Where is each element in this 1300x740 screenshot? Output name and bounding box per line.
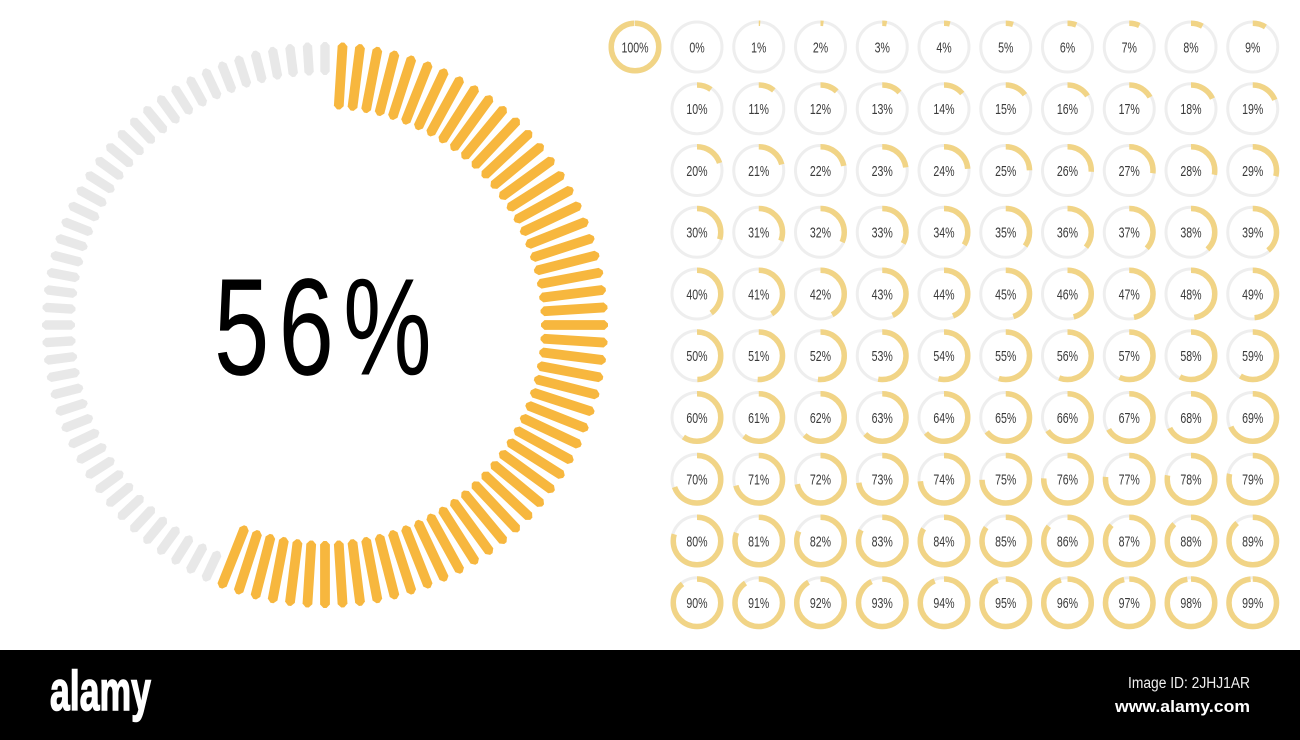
gauge 100%: [610, 22, 660, 72]
gauge 17%: 17%: [1119, 101, 1140, 117]
gauge 58%: [1166, 331, 1216, 381]
gauge 49%: [1228, 269, 1278, 319]
large radial gauge showing 56%: [42, 42, 608, 608]
gauge 16%: 16%: [1057, 101, 1078, 117]
gauge 3%: 3%: [875, 40, 890, 56]
gauge 59%: 59%: [1242, 348, 1263, 364]
gauge 70%: 70%: [686, 472, 708, 488]
gauge 13%: [857, 84, 907, 134]
gauge 68%: 68%: [1180, 410, 1202, 426]
gauge 12%: [796, 84, 846, 134]
gauge 64%: 64%: [933, 410, 955, 426]
gauge 1%: [734, 22, 784, 72]
gauge 95%: [981, 578, 1031, 628]
gauge 100%: 100%: [621, 40, 649, 56]
gauge 14%: 14%: [933, 101, 955, 117]
gauge 33%: [857, 207, 907, 257]
gauge 43%: 43%: [872, 287, 893, 303]
gauge 19%: [1228, 84, 1278, 134]
small gauge grid: [610, 22, 1278, 628]
gauge 91%: [734, 578, 784, 628]
gauge 98%: [1166, 578, 1216, 628]
gauge 72%: [796, 454, 846, 504]
gauge 18%: 18%: [1180, 101, 1202, 117]
gauge 61%: [734, 392, 784, 442]
gauge 40%: [672, 269, 722, 319]
gauge 77%: 77%: [1119, 472, 1140, 488]
gauge 62%: [796, 392, 846, 442]
gauge 42%: [796, 269, 846, 319]
gauge 89%: 89%: [1242, 534, 1263, 550]
gauge 3%: [857, 22, 907, 72]
gauge 11%: [734, 84, 784, 134]
gauge 0%: [672, 22, 722, 72]
gauge 99%: 99%: [1242, 595, 1263, 611]
gauge 30%: [672, 207, 722, 257]
gauge 98%: 98%: [1180, 595, 1202, 611]
gauge 17%: [1104, 84, 1154, 134]
gauge 90%: [672, 578, 722, 628]
gauge 26%: 26%: [1057, 163, 1078, 179]
gauge 32%: [796, 207, 846, 257]
gauge 66%: [1042, 392, 1092, 442]
gold progress ticks: [216, 42, 608, 608]
gauge 20%: 20%: [686, 163, 708, 179]
gauge 2%: 2%: [813, 40, 828, 56]
gauge 84%: [919, 516, 969, 566]
gauge 6%: [1042, 22, 1092, 72]
gauge 34%: [919, 207, 969, 257]
gauge 56%: 56%: [1057, 348, 1078, 364]
gauge 39%: [1228, 207, 1278, 257]
gauge 36%: [1042, 207, 1092, 257]
gauge 69%: 69%: [1242, 410, 1263, 426]
gauge 54%: 54%: [933, 348, 955, 364]
gauge 64%: [919, 392, 969, 442]
gauge 86%: [1042, 516, 1092, 566]
gauge 38%: 38%: [1180, 225, 1202, 241]
gauge 71%: [734, 454, 784, 504]
gauge 16%: [1042, 84, 1092, 134]
gauge 55%: 55%: [995, 348, 1016, 364]
gauge 87%: 87%: [1119, 534, 1140, 550]
gauge 89%: [1228, 516, 1278, 566]
gauge 86%: 86%: [1057, 534, 1078, 550]
gauge 40%: 40%: [686, 287, 708, 303]
gauge 53%: [857, 331, 907, 381]
gauge 95%: 95%: [995, 595, 1016, 611]
gauge 57%: [1104, 331, 1154, 381]
gauge 88%: [1166, 516, 1216, 566]
gauge 63%: [857, 392, 907, 442]
gauge 99%: [1228, 578, 1278, 628]
gauge 7%: [1104, 22, 1154, 72]
gauge 7%: 7%: [1122, 40, 1137, 56]
gauge 22%: 22%: [810, 163, 831, 179]
gauge 51%: [734, 331, 784, 381]
gauge 48%: [1166, 269, 1216, 319]
gauge 66%: 66%: [1057, 410, 1078, 426]
gauge 5%: 5%: [998, 40, 1013, 56]
gauge 92%: 92%: [810, 595, 831, 611]
gauge 51%: 51%: [748, 348, 769, 364]
gauge 93%: 93%: [872, 595, 893, 611]
gauge 31%: [734, 207, 784, 257]
gauge 52%: [796, 331, 846, 381]
image id: Image ID: 2JHJ1AR: [1128, 675, 1250, 692]
gauge 0%: 0%: [689, 40, 705, 56]
gauge 1%: 1%: [751, 40, 766, 56]
gauge 56%: [1042, 331, 1092, 381]
gauge 41%: 41%: [748, 287, 769, 303]
gauge 30%: 30%: [686, 225, 708, 241]
gauge 50%: [672, 331, 722, 381]
gauge 81%: 81%: [748, 534, 769, 550]
gauge 13%: 13%: [872, 101, 893, 117]
gauge 21%: [734, 146, 784, 196]
gauge 82%: 82%: [810, 534, 831, 550]
gauge 6%: 6%: [1060, 40, 1075, 56]
gauge 49%: 49%: [1242, 287, 1263, 303]
gauge 65%: [981, 392, 1031, 442]
gauge 14%: [919, 84, 969, 134]
gauge 18%: [1166, 84, 1216, 134]
gauge 35%: [981, 207, 1031, 257]
gauge 69%: [1228, 392, 1278, 442]
gauge 36%: 36%: [1057, 225, 1078, 241]
gauge 87%: [1104, 516, 1154, 566]
gauge 43%: [857, 269, 907, 319]
gauge 23%: 23%: [872, 163, 893, 179]
gauge 83%: [857, 516, 907, 566]
gauge 31%: 31%: [748, 225, 769, 241]
gauge 92%: [796, 578, 846, 628]
gauge 80%: [672, 516, 722, 566]
gauge 74%: 74%: [933, 472, 955, 488]
gauge 24%: 24%: [933, 163, 955, 179]
gauge 75%: [981, 454, 1031, 504]
gauge 62%: 62%: [810, 410, 831, 426]
gauge 32%: 32%: [810, 225, 831, 241]
gauge 4%: 4%: [936, 40, 952, 56]
gauge 53%: 53%: [872, 348, 893, 364]
gauge 88%: 88%: [1180, 534, 1202, 550]
gauge 15%: [981, 84, 1031, 134]
gauge 63%: 63%: [872, 410, 893, 426]
gauge 37%: 37%: [1119, 225, 1140, 241]
gauge 38%: [1166, 207, 1216, 257]
grey remaining ticks: [42, 42, 330, 583]
gauge 5%: [981, 22, 1031, 72]
gauge 46%: [1042, 269, 1092, 319]
gauge 85%: [981, 516, 1031, 566]
gauge 50%: 50%: [686, 348, 708, 364]
gauge 47%: 47%: [1119, 287, 1140, 303]
gauge 25%: [981, 146, 1031, 196]
gauge 41%: [734, 269, 784, 319]
gauge 78%: 78%: [1180, 472, 1202, 488]
gauge 84%: 84%: [933, 534, 955, 550]
gauge 27%: 27%: [1119, 163, 1140, 179]
website: www.alamy.com: [1114, 697, 1250, 716]
gauge 80%: 80%: [686, 534, 708, 550]
gauge 10%: [672, 84, 722, 134]
gauge 52%: 52%: [810, 348, 831, 364]
gauge 75%: 75%: [995, 472, 1016, 488]
gauge 90%: 90%: [686, 595, 708, 611]
gauge 2%: [796, 22, 846, 72]
gauge 25%: 25%: [995, 163, 1016, 179]
big percentage value: 56%: [214, 251, 441, 404]
gauge 72%: 72%: [810, 472, 831, 488]
gauge 27%: [1104, 146, 1154, 196]
gauge 29%: 29%: [1242, 163, 1263, 179]
gauge 60%: [672, 392, 722, 442]
gauge 76%: 76%: [1057, 472, 1078, 488]
gauge 10%: 10%: [686, 101, 708, 117]
gauge 44%: [919, 269, 969, 319]
gauge 12%: 12%: [810, 101, 831, 117]
gauge 23%: [857, 146, 907, 196]
gauge 45%: [981, 269, 1031, 319]
gauge 15%: 15%: [995, 101, 1016, 117]
gauge 8%: [1166, 22, 1216, 72]
gauge 11%: 11%: [749, 101, 769, 117]
gauge 83%: 83%: [872, 534, 893, 550]
gauge 93%: [857, 578, 907, 628]
gauge 20%: [672, 146, 722, 196]
gauge 58%: 58%: [1180, 348, 1202, 364]
gauge 54%: [919, 331, 969, 381]
gauge 96%: 96%: [1057, 595, 1078, 611]
gauge 28%: 28%: [1180, 163, 1202, 179]
gauge 33%: 33%: [872, 225, 893, 241]
gauge 59%: [1228, 331, 1278, 381]
gauge 71%: 71%: [748, 472, 769, 488]
gauge 37%: [1104, 207, 1154, 257]
gauge 76%: [1042, 454, 1092, 504]
gauge 19%: 19%: [1242, 101, 1263, 117]
gauge 22%: [796, 146, 846, 196]
gauge 97%: [1104, 578, 1154, 628]
gauge 94%: 94%: [933, 595, 955, 611]
gauge 70%: [672, 454, 722, 504]
gauge 85%: 85%: [995, 534, 1016, 550]
gauge 48%: 48%: [1180, 287, 1202, 303]
gauge 28%: [1166, 146, 1216, 196]
gauge 74%: [919, 454, 969, 504]
gauge 45%: 45%: [995, 287, 1016, 303]
gauge 60%: 60%: [686, 410, 708, 426]
gauge 82%: [796, 516, 846, 566]
gauge 97%: 97%: [1119, 595, 1140, 611]
gauge 57%: 57%: [1119, 348, 1140, 364]
gauge 24%: [919, 146, 969, 196]
gauge 96%: [1042, 578, 1092, 628]
gauge 68%: [1166, 392, 1216, 442]
gauge 73%: [857, 454, 907, 504]
gauge 67%: 67%: [1119, 410, 1140, 426]
gauge 9%: [1228, 22, 1278, 72]
gauge 29%: [1228, 146, 1278, 196]
gauge 4%: [919, 22, 969, 72]
gauge 79%: 79%: [1242, 472, 1263, 488]
gauge 39%: 39%: [1242, 225, 1263, 241]
gauge 21%: 21%: [748, 163, 769, 179]
gauge 55%: [981, 331, 1031, 381]
gauge 65%: 65%: [995, 410, 1016, 426]
gauge 94%: [919, 578, 969, 628]
gauge 79%: [1228, 454, 1278, 504]
gauge 91%: 91%: [748, 595, 769, 611]
gauge 73%: 73%: [872, 472, 893, 488]
gauge 67%: [1104, 392, 1154, 442]
footer band: [0, 650, 1300, 740]
gauge 9%: 9%: [1245, 40, 1260, 56]
gauge 61%: 61%: [748, 410, 769, 426]
gauge 8%: 8%: [1183, 40, 1199, 56]
gauge 44%: 44%: [933, 287, 955, 303]
gauge 46%: 46%: [1057, 287, 1078, 303]
alamy logo: alamy: [50, 660, 151, 722]
gauge 42%: 42%: [810, 287, 831, 303]
gauge 34%: 34%: [933, 225, 955, 241]
gauge 78%: [1166, 454, 1216, 504]
gauge 81%: [734, 516, 784, 566]
gauge 26%: [1042, 146, 1092, 196]
gauge 35%: 35%: [995, 225, 1016, 241]
gauge 77%: [1104, 454, 1154, 504]
gauge 47%: [1104, 269, 1154, 319]
